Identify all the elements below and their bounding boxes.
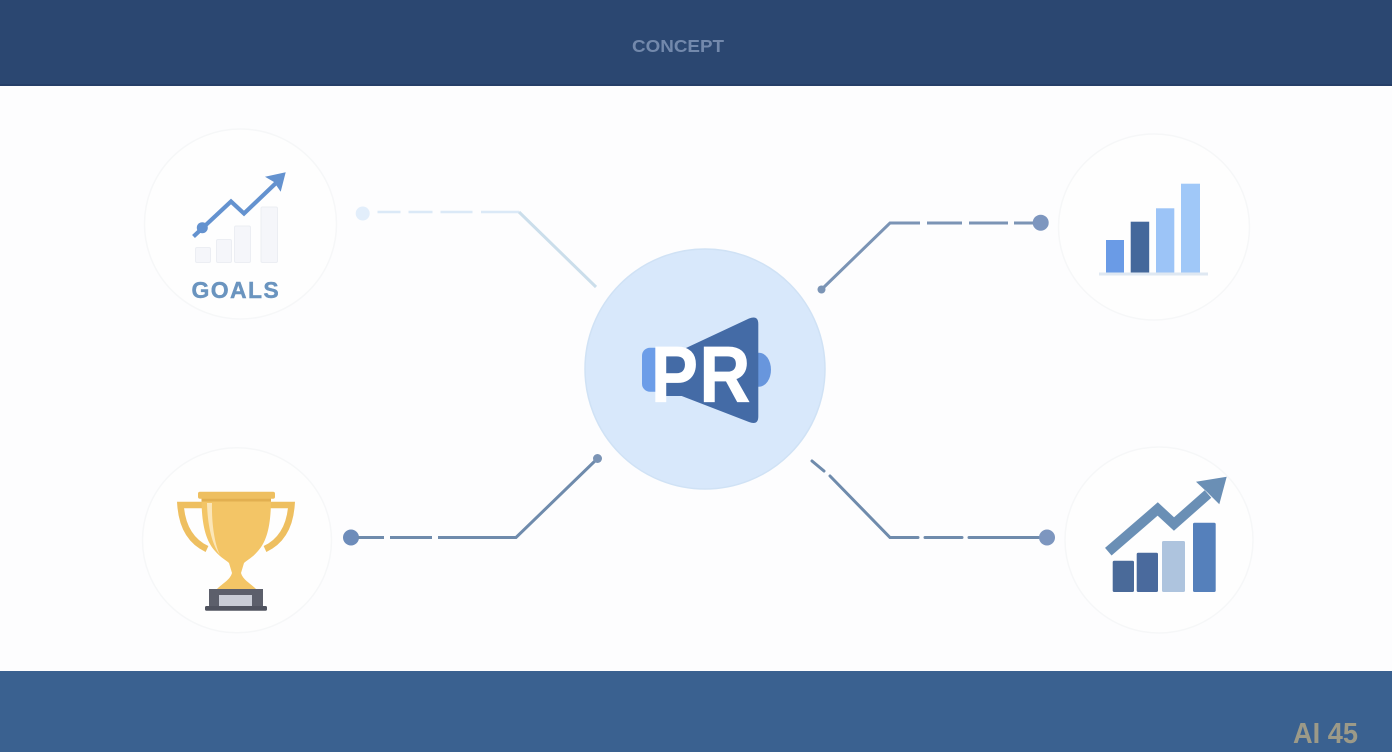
connector: PR to bar chart [818,215,1049,294]
panel: growth chart [1065,447,1253,633]
header band [0,0,1392,86]
footer band [0,671,1392,752]
panel: goals [144,129,336,319]
header title: CONCEPT [632,36,724,56]
footer watermark: AI 45 [1293,718,1358,750]
icon: megaphone [642,318,771,423]
icon: trophy [180,492,292,611]
panel: bar chart [1058,134,1250,320]
PR lettering: P [651,330,698,419]
PR lettering [651,330,750,419]
panel: central PR megaphone [585,249,825,489]
icon: growth bars [1113,523,1216,592]
icon: growth arrow [1108,477,1227,552]
icon: rising arrow [194,172,286,236]
icon: bars [1106,184,1200,272]
connector: PR to growth chart [812,461,1055,546]
connector: goals to PR [356,206,596,287]
panel: trophy [142,448,332,633]
icon: faded bars [196,207,278,262]
PR lettering: R [700,330,750,419]
icon: baseline [1099,272,1208,276]
goals label: GOALS [192,277,280,303]
connector: trophy to PR [343,454,602,546]
